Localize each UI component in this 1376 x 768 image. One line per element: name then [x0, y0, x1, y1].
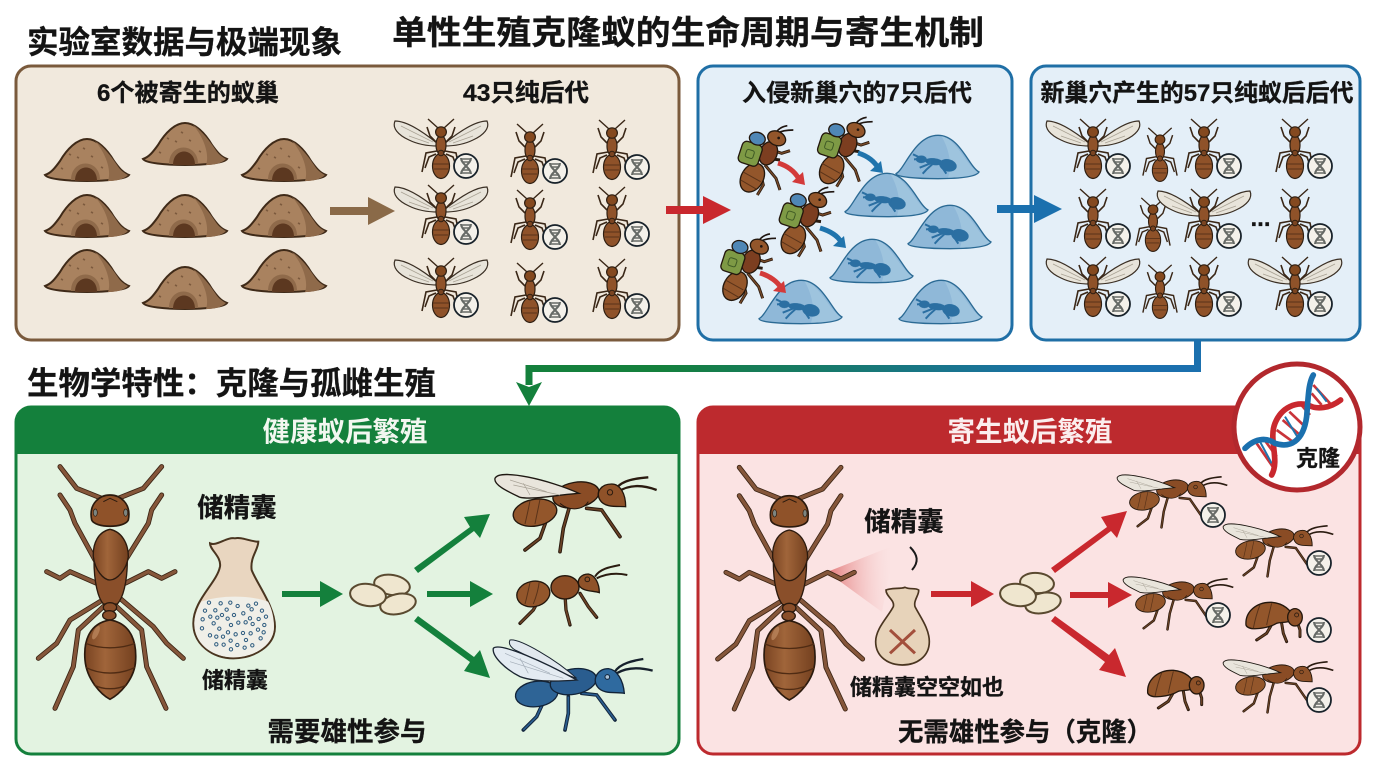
- panel heading: 健康蚁后繁殖: [262, 416, 428, 447]
- bracket mark: [910, 547, 917, 570]
- ellipsis: ...: [1250, 205, 1271, 232]
- icon: winged blue ant: [493, 640, 653, 730]
- sub-heading: invasion: 入侵新巢穴的7只后代: [742, 80, 972, 107]
- arrows: green to offspring: [414, 514, 493, 678]
- label: spermatheca empty: 储精囊空空如也: [850, 675, 1004, 700]
- panel: parasitic queen reproduction: [698, 407, 1360, 754]
- caption: male required: 需要雄性参与: [268, 717, 426, 747]
- arrows: red to offspring: [1051, 511, 1132, 677]
- icon: parasitic queen ant top view: [718, 467, 863, 709]
- sub-heading: 43 offspring: 43只纯后代: [463, 79, 589, 107]
- sub-heading: six nests: 6个被寄生的蚁巢: [97, 80, 279, 107]
- icon: eggs: [999, 572, 1063, 617]
- panel: parasitized nests and offspring: [16, 66, 679, 340]
- icon group: offspring ants: [394, 119, 649, 322]
- panel heading: 寄生蚁后繁殖: [948, 416, 1112, 447]
- highlight wedge: [827, 545, 895, 612]
- arrow: brown: [330, 197, 395, 225]
- icon group: queen offspring ants: [1046, 119, 1342, 318]
- heading: lab data: 实验室数据与极端现象: [27, 24, 342, 60]
- arrow: green to eggs: [282, 581, 343, 607]
- label: spermatheca top: 储精囊: [197, 493, 277, 523]
- icon group: blue mounds: [759, 135, 991, 324]
- icon group: ants with backpacks: [718, 117, 873, 305]
- label: clone: 克隆: [1296, 446, 1340, 471]
- badge: DNA clone: [1234, 364, 1360, 490]
- icon group: brown mounds: [45, 123, 326, 309]
- icon: queen ant top view: [38, 467, 183, 708]
- label: spermatheca: 储精囊: [864, 507, 944, 537]
- arrow: red to invasion: [666, 196, 731, 224]
- heading: biology: 生物学特性：克隆与孤雌生殖: [27, 365, 436, 401]
- icon: empty spermatheca: [876, 587, 929, 665]
- arrow: elbow connector: [516, 340, 1198, 406]
- arrow: red to eggs: [931, 581, 994, 607]
- caption: no male required: 无需雄性参与（克隆）: [898, 717, 1152, 747]
- icon: winged brown ant: [495, 475, 657, 552]
- panel: invasion: [698, 66, 1012, 340]
- sub-heading: 57 offspring: 新巢穴产生的57只纯蚁后后代: [1040, 80, 1354, 107]
- arrow: blue to new queens: [997, 195, 1062, 223]
- arrows: invasion movement: [760, 153, 883, 293]
- icon: worker ant: [514, 565, 627, 625]
- icon: full spermatheca: [193, 538, 275, 658]
- label: spermatheca bottom: 储精囊: [202, 668, 268, 693]
- icon group: cloned offspring ants: [1117, 475, 1333, 712]
- icon: eggs: [349, 572, 418, 618]
- panel: 57 queen offspring: [1031, 66, 1360, 340]
- title: 单性生殖克隆蚁的生命周期与寄生机制: [392, 14, 984, 51]
- panel: healthy queen reproduction: [16, 407, 679, 754]
